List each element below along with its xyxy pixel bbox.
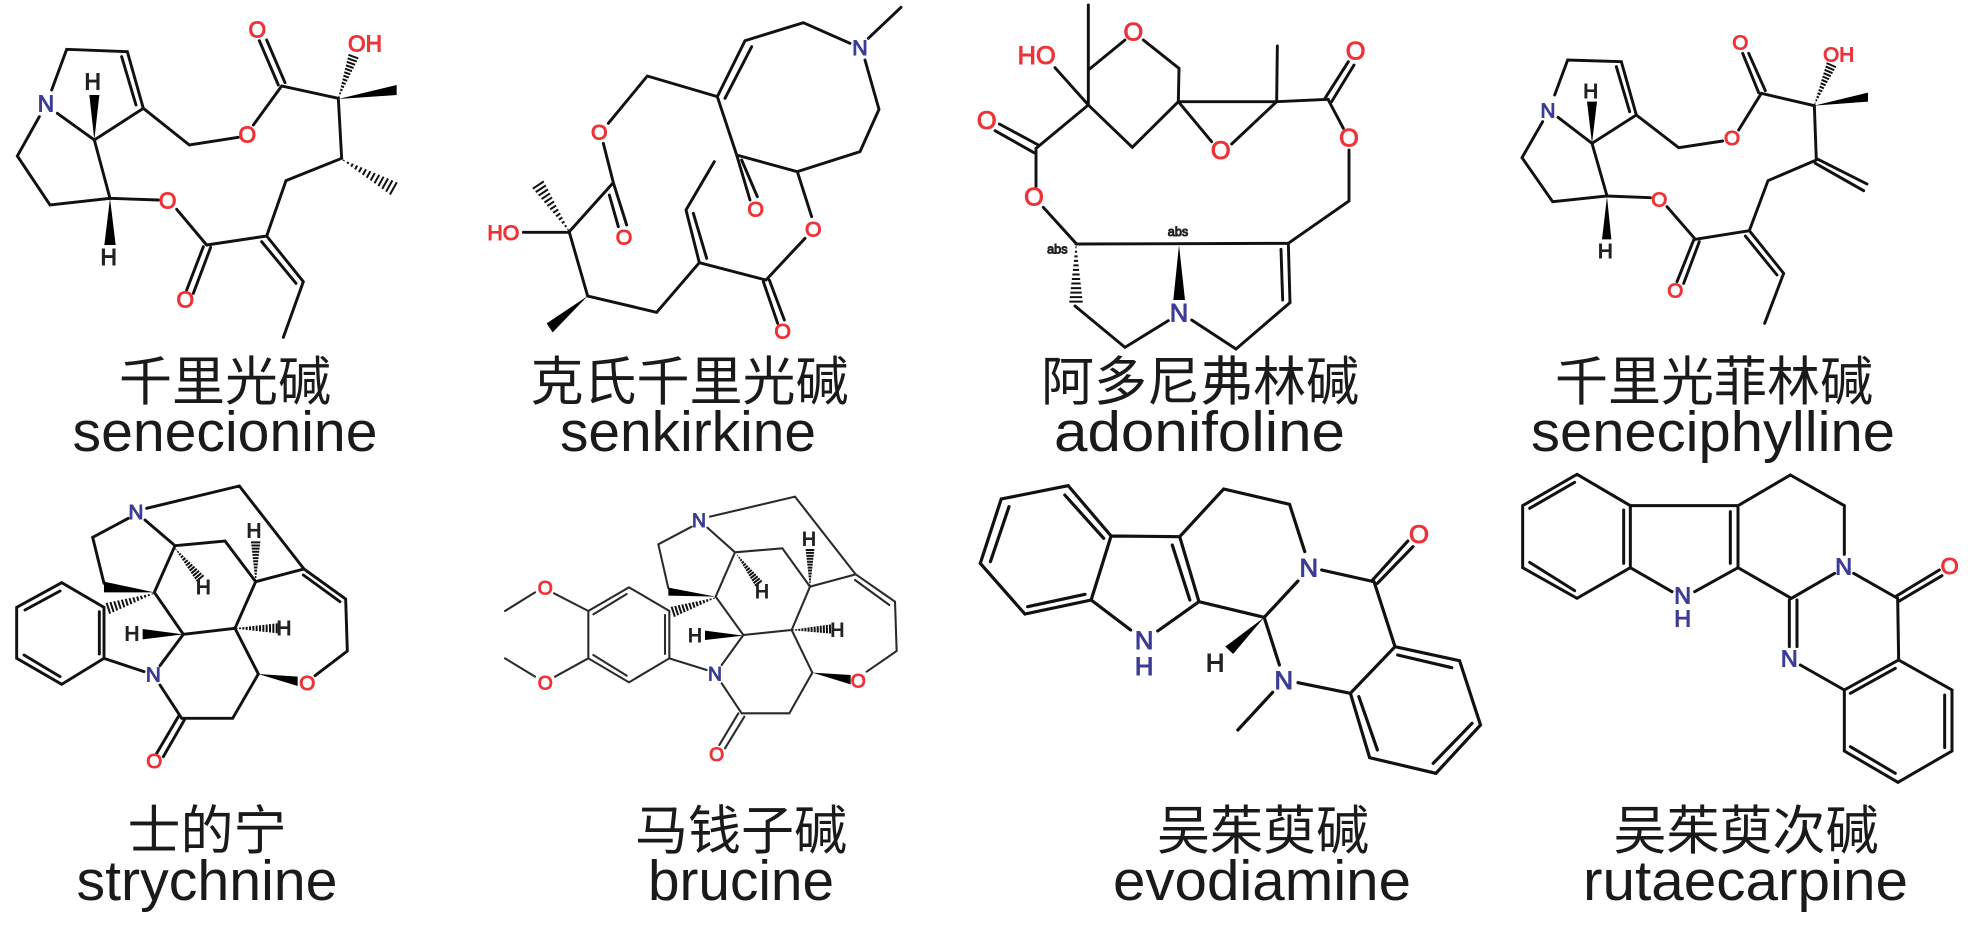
structure: rutaecarpine: N <box>1781 646 1798 672</box>
structure: seneciphylline: H <box>1583 80 1598 103</box>
structure: senecionine: O <box>249 16 266 42</box>
structure: brucine: O <box>538 673 553 694</box>
English name: adonifoline: adonifoline <box>1054 400 1345 464</box>
structure: adonifoline: abs <box>1168 225 1188 239</box>
structure: senkirkine: O <box>747 198 764 222</box>
structure: rutaecarpine: O <box>1941 553 1959 579</box>
English name: rutaecarpine: rutaecarpine <box>1583 849 1908 913</box>
English name: seneciphylline: seneciphylline <box>1531 400 1895 464</box>
structure: senecionine: O <box>159 187 176 213</box>
structure: strychnine: N <box>146 664 161 687</box>
structure: brucine: H <box>830 620 844 641</box>
structure: adonifoline: O <box>1024 184 1044 212</box>
structure: senkirkine: O <box>616 225 632 249</box>
structure: brucine: O <box>851 672 866 693</box>
panel: evodiamine <box>980 486 1481 913</box>
structure: senecionine: OH <box>348 31 382 57</box>
structure: evodiamine: H <box>1206 649 1224 677</box>
English name: brucine: brucine <box>648 849 834 913</box>
structure: seneciphylline: O <box>1724 127 1740 150</box>
structure: senecionine: H <box>84 68 101 94</box>
English name: senecionine: senecionine <box>72 400 377 464</box>
Chinese name: adonifoline: 阿多尼弗林碱 <box>1041 353 1359 412</box>
structure: seneciphylline: O <box>1667 279 1683 302</box>
structure: senkirkine: N <box>852 36 868 60</box>
structure: adonifoline: HO <box>1018 42 1056 70</box>
structure: senkirkine: O <box>805 218 822 242</box>
structure: brucine: O <box>538 578 553 599</box>
English name: strychnine: strychnine <box>76 849 338 913</box>
structure: evodiamine <box>980 486 1481 773</box>
panel: adonifoline <box>977 5 1366 464</box>
Chinese name: strychnine: 士的宁 <box>128 802 286 861</box>
structure: seneciphylline: OH <box>1823 44 1854 67</box>
panel: seneciphylline <box>1522 32 1895 464</box>
structure: seneciphylline: N <box>1541 99 1555 122</box>
structure: senecionine: N <box>38 91 54 117</box>
structure: brucine: N <box>692 511 706 532</box>
structure: strychnine: N <box>129 501 143 524</box>
panel: senkirkine <box>487 7 901 464</box>
structure: seneciphylline: O <box>1732 32 1748 55</box>
Chinese name: senkirkine: 克氏千里光碱 <box>530 353 848 412</box>
structure: rutaecarpine: N <box>1835 553 1852 579</box>
structure: senecionine: H <box>100 244 117 270</box>
structure: senkirkine <box>487 7 901 344</box>
panel: brucine <box>505 497 897 913</box>
structure: adonifoline <box>977 5 1366 349</box>
English name: evodiamine: evodiamine <box>1113 849 1411 913</box>
structure: evodiamine: N <box>1135 627 1153 655</box>
English name: senkirkine: senkirkine <box>560 400 816 464</box>
structure: strychnine: O <box>299 672 315 695</box>
structure: strychnine: H <box>196 576 211 599</box>
structure: senkirkine: O <box>774 320 791 344</box>
structure: brucine: N <box>708 664 722 685</box>
structure: brucine: H <box>688 626 702 647</box>
panel: rutaecarpine <box>1523 474 1959 913</box>
structure: adonifoline: O <box>1346 38 1366 66</box>
structure: rutaecarpine: H <box>1674 606 1691 632</box>
structure: adonifoline: O <box>1211 137 1231 165</box>
structure: evodiamine: N <box>1300 554 1318 582</box>
structure: rutaecarpine: N <box>1674 582 1691 608</box>
structure: strychnine: O <box>146 750 162 773</box>
structure: brucine: H <box>755 582 769 603</box>
panel: senecionine <box>17 16 397 464</box>
Chinese name: senecionine: 千里光碱 <box>119 353 331 412</box>
structure: senkirkine: O <box>591 120 608 144</box>
structure: evodiamine: H <box>1135 653 1153 681</box>
structure: seneciphylline: O <box>1651 188 1667 211</box>
structure: evodiamine: O <box>1409 521 1429 549</box>
structure: brucine <box>505 497 897 766</box>
structure: adonifoline: O <box>1123 19 1143 47</box>
Chinese name: brucine: 马钱子碱 <box>635 802 847 861</box>
structure: strychnine: H <box>277 617 291 640</box>
structure: strychnine: H <box>125 623 139 646</box>
structure: seneciphylline: H <box>1598 240 1613 263</box>
structure: adonifoline: O <box>977 107 997 135</box>
Chinese name: rutaecarpine: 吴茱萸次碱 <box>1614 802 1878 861</box>
structure: adonifoline: abs <box>1047 243 1068 257</box>
structure: senecionine <box>17 16 397 337</box>
structure: senkirkine: HO <box>487 221 519 245</box>
panel: strychnine <box>17 486 347 913</box>
structure: strychnine: H <box>247 519 261 542</box>
structure: rutaecarpine <box>1523 474 1959 782</box>
structure: senecionine: O <box>177 287 194 313</box>
Chinese name: seneciphylline: 千里光菲林碱 <box>1555 353 1873 412</box>
structure: senecionine: O <box>239 121 256 147</box>
structure: adonifoline: N <box>1170 299 1188 327</box>
structure: seneciphylline <box>1522 32 1868 323</box>
structure: brucine: H <box>802 529 816 550</box>
structure: brucine: O <box>709 745 724 766</box>
Chinese name: evodiamine: 吴茱萸碱 <box>1157 802 1369 861</box>
structure: adonifoline: O <box>1339 124 1359 152</box>
structure: evodiamine: N <box>1275 667 1293 695</box>
structure: strychnine <box>17 486 347 773</box>
